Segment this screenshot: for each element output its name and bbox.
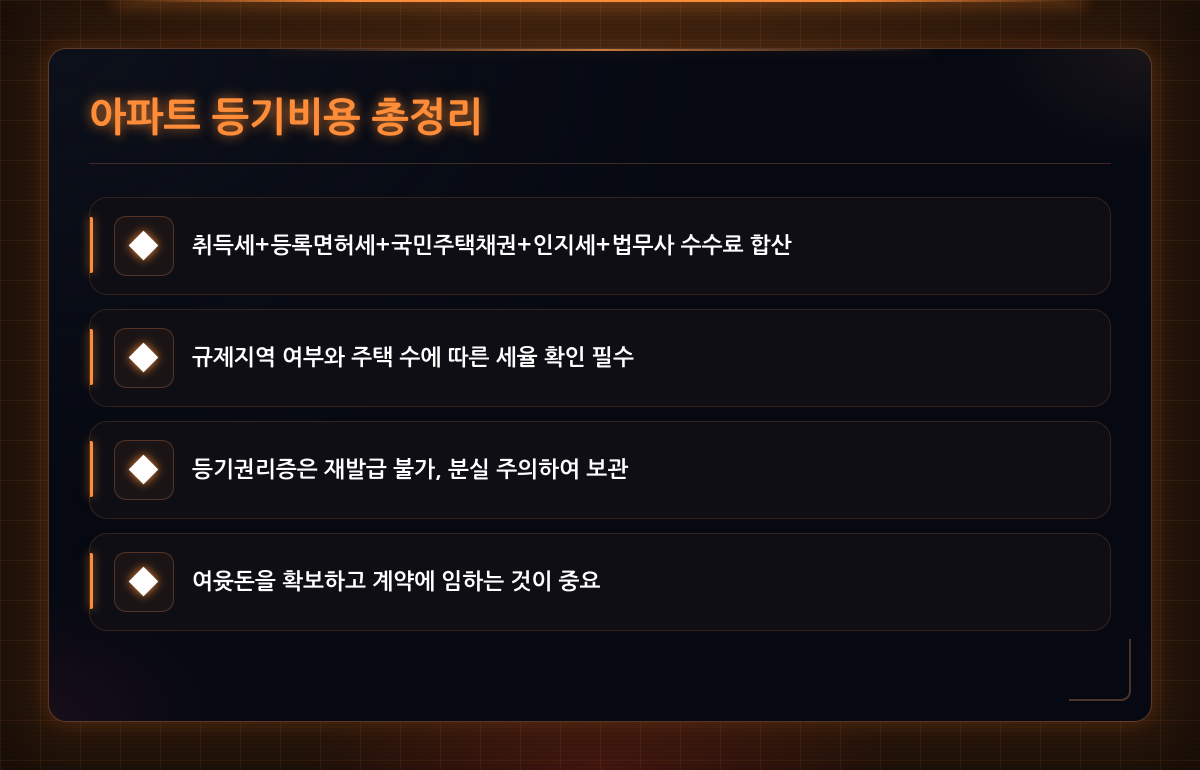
text 1: 취득세+등록면허세+국민주택채권+인지세+법무사 수수료 합산	[192, 235, 792, 257]
list item 1	[89, 197, 1111, 295]
icon: diamond 1	[114, 216, 174, 276]
text 3: 등기권리증은 재발급 불가, 분실 주의하여 보관	[192, 459, 628, 481]
corner bracket	[1069, 639, 1131, 701]
top glow bar	[120, 0, 1080, 2]
list item 3	[89, 421, 1111, 519]
list item 2	[89, 309, 1111, 407]
title: 아파트 등기비용 총정리	[89, 98, 483, 137]
list item 4	[89, 533, 1111, 631]
icon: diamond 4	[114, 552, 174, 612]
icon: diamond 3	[114, 440, 174, 500]
icon: diamond 2	[114, 328, 174, 388]
text 2: 규제지역 여부와 주택 수에 따른 세율 확인 필수	[192, 347, 634, 369]
text 4: 여윳돈을 확보하고 계약에 임하는 것이 중요	[192, 571, 600, 593]
